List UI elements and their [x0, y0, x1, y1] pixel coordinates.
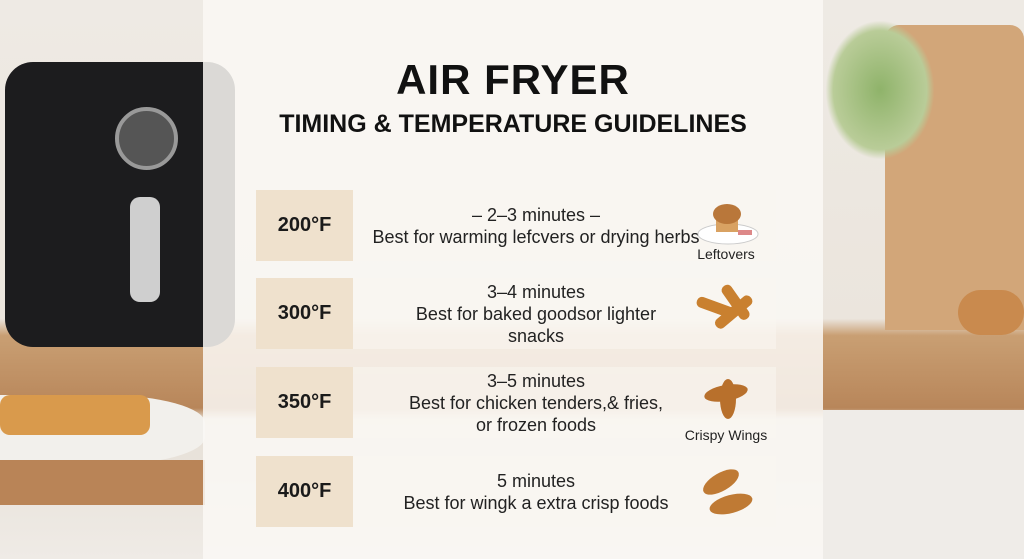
row: 350F	[256, 367, 776, 438]
icon: wings 2	[703, 469, 752, 514]
row: 350F: Crispy Wings	[685, 427, 767, 443]
cabinet right	[823, 410, 1024, 559]
row: 300F: 300°F	[278, 302, 331, 324]
row: 400F: Best for wingk a extra crisp foods	[403, 492, 669, 512]
row: 300F: snacks	[508, 326, 564, 346]
row: 300F	[256, 278, 776, 349]
row: 350F: 350°F	[278, 391, 331, 413]
cutting board right	[885, 25, 1024, 330]
row: 200F: Leftovers	[697, 246, 755, 262]
title: AIR FRYER	[396, 56, 630, 103]
plant	[825, 20, 935, 160]
plate of fries	[0, 395, 205, 465]
row: 400F	[256, 456, 776, 527]
icon: fries	[696, 284, 752, 329]
central panel	[203, 0, 823, 559]
row: 200F: – 2–3 minutes –	[472, 204, 600, 224]
wood board left	[0, 460, 205, 505]
row: 350F: 3–5 minutes	[487, 370, 585, 390]
row: 200F: 200°F	[278, 214, 331, 236]
row: 200F	[256, 190, 776, 261]
subtitle: TIMING & TEMPERATURE GUIDELINES	[279, 110, 747, 138]
icon: wings	[704, 379, 748, 419]
row: 400F: 5 minutes	[497, 470, 575, 490]
air fryer	[5, 62, 235, 347]
row: 350F: or frozen foods	[476, 414, 596, 434]
row: 200F: Best for warming lefcvers or drying herbs	[372, 226, 700, 246]
row: 400F: 400°F	[278, 480, 331, 502]
icon: muffin	[698, 204, 758, 244]
row: 300F: 3–4 minutes	[487, 282, 585, 302]
bread	[958, 290, 1024, 335]
row: 300F: Best for baked goodsor lighter	[416, 304, 656, 324]
row: 350F: Best for chicken tenders,& fries,	[409, 392, 663, 412]
